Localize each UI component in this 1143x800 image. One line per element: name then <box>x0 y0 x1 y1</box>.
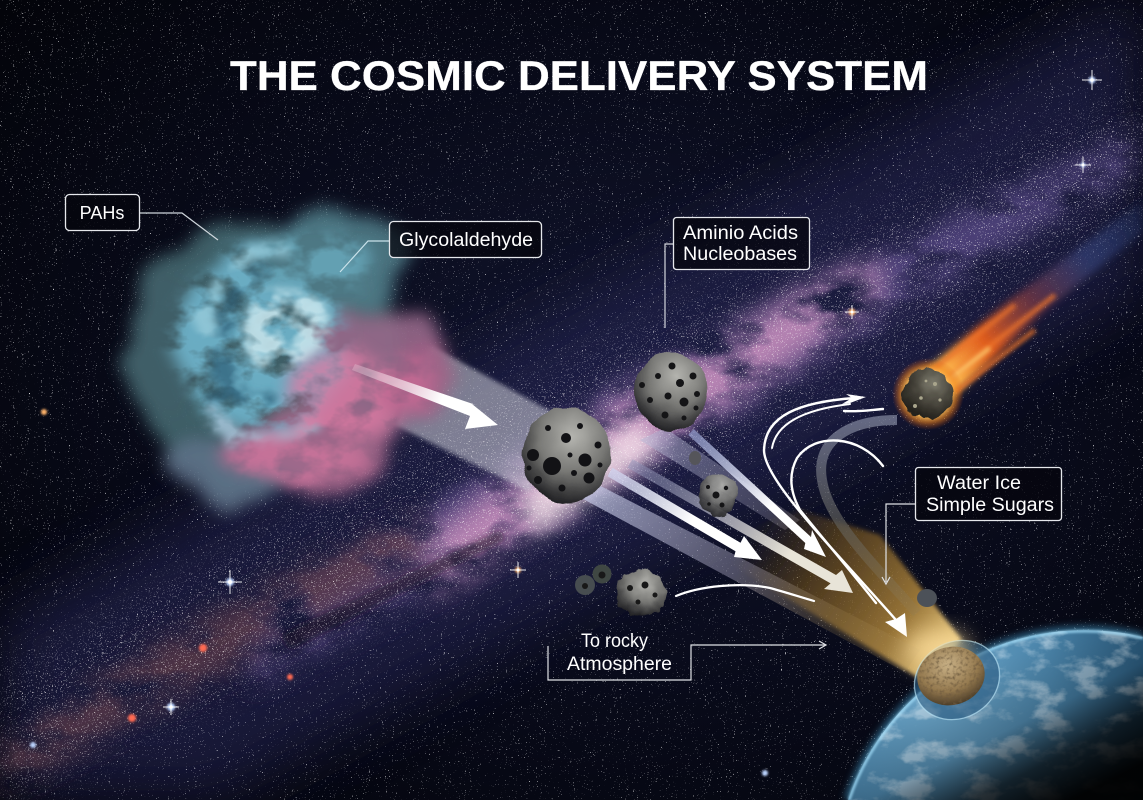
label: Amino Acids and Nucleobases: Nucleobases <box>683 244 797 265</box>
label: PAHs: PAHs <box>80 203 124 223</box>
label: To rocky Atmosphere: Atmosphere <box>567 654 672 675</box>
impact glow <box>906 630 970 670</box>
molecular cloud <box>122 212 452 503</box>
impact crater ring <box>900 625 1014 735</box>
beam: cloud to asteroid <box>395 345 552 492</box>
cloud arrow <box>352 364 498 429</box>
label: To rocky Atmosphere: To rocky <box>581 631 648 652</box>
label: Water Ice and Simple Sugars <box>882 468 1062 584</box>
cloud mid blue <box>177 234 375 435</box>
comet tail <box>920 200 1143 395</box>
cloud body <box>122 212 452 503</box>
cloud pale core <box>204 245 327 441</box>
label: PAHs <box>66 194 218 240</box>
label: Amino Acids and Nucleobases <box>665 218 810 328</box>
arrow: middle stream <box>627 459 853 593</box>
asteroid upper <box>634 352 708 430</box>
asteroid tiny <box>689 451 701 465</box>
cloud dark swirl <box>215 270 275 405</box>
title: THE COSMIC DELIVERY SYSTEM <box>230 52 928 99</box>
gold delivery cone <box>700 510 962 680</box>
cloud pink <box>235 353 438 482</box>
asteroid near planet <box>917 589 937 607</box>
arrowhead: top curve <box>842 394 866 404</box>
arrowhead: long curve <box>885 613 907 637</box>
asteroid large <box>522 407 610 503</box>
planet <box>848 628 1143 800</box>
arrow: upper asteroid to impact <box>688 429 826 557</box>
comet <box>892 200 1143 430</box>
impact rock <box>911 639 991 713</box>
asteroid mid <box>699 473 737 515</box>
curved white paths <box>676 398 896 620</box>
asteroid group lower <box>575 564 666 616</box>
arrow: asteroid to impact <box>608 468 762 560</box>
label: Amino Acids and Nucleobases: Aminio Acids <box>683 223 798 244</box>
label: Glycolaldehyde <box>340 222 542 272</box>
label: To rocky Atmosphere <box>548 631 826 680</box>
asteroid delivery beams <box>570 428 920 672</box>
label: Water Ice and Simple Sugars: Simple Sugars <box>926 495 1054 516</box>
label: Glycolaldehyde: Glycolaldehyde <box>399 230 533 251</box>
gray curved stream <box>821 420 917 613</box>
label: Water Ice and Simple Sugars: Water Ice <box>937 473 1021 494</box>
